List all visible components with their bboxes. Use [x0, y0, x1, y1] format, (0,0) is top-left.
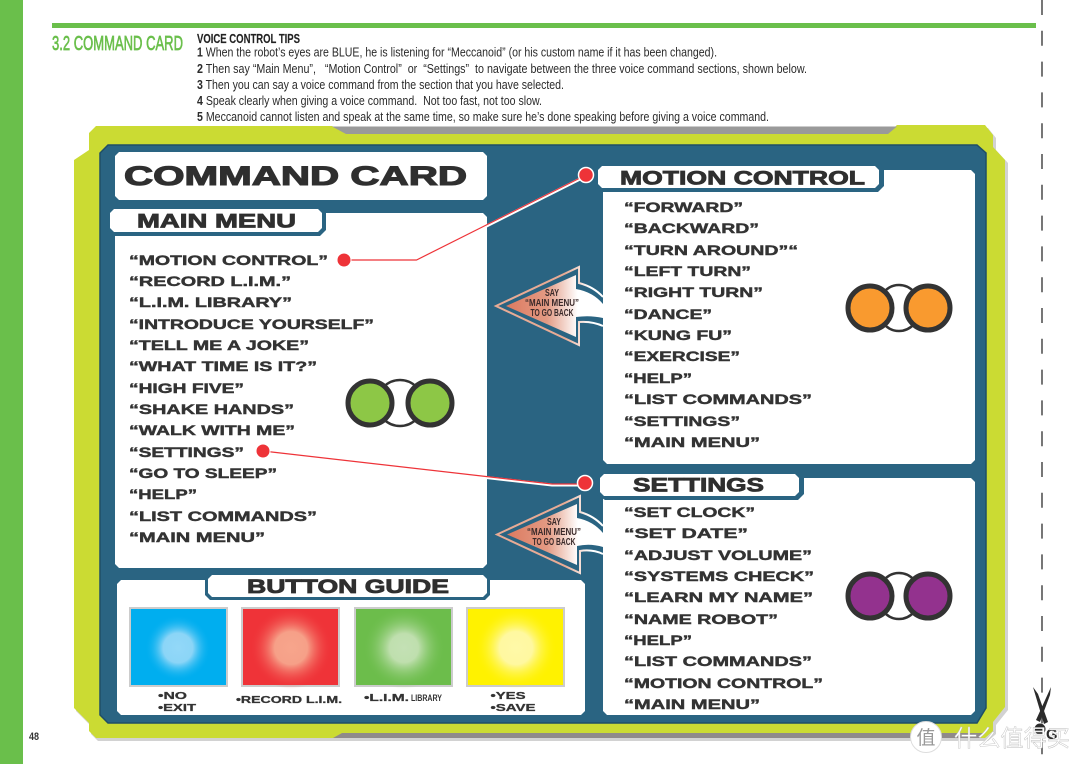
yellow button: •YES	[490, 690, 526, 702]
motion control commands: “MAIN MENU”	[624, 434, 760, 450]
tips heading: VOICE CONTROL TIPS	[197, 32, 300, 46]
arrow: say main menu, motion control: “MAIN MENU”	[525, 298, 579, 309]
settings commands: “SYSTEMS CHECK”	[624, 568, 814, 584]
voice control tips text block	[197, 32, 807, 124]
settings tab	[597, 471, 804, 500]
icon: scissors: G	[1046, 726, 1058, 743]
motion control tab	[595, 163, 884, 192]
watermark: 什么值得买	[954, 725, 1070, 751]
tip 2: 2 Then say “Main Menu”, “Motion Control” or “Settings” to navigate between the three voice command sections, shown below.	[197, 62, 807, 76]
main menu commands: “GO TO SLEEP”	[129, 465, 277, 481]
motion control commands: “LEFT TURN”	[624, 263, 751, 279]
arrow: say main menu, motion control	[496, 267, 603, 345]
settings commands: “MOTION CONTROL”	[624, 675, 823, 691]
yellow button: •SAVE	[490, 702, 536, 714]
motion control commands: “EXERCISE”	[624, 348, 740, 364]
top green rule	[52, 23, 1036, 28]
main menu commands: “RECORD L.I.M.”	[129, 273, 291, 289]
main menu commands: “WALK WITH ME”	[129, 422, 295, 438]
motion control commands: “FORWARD”	[624, 199, 743, 215]
main menu commands: “MAIN MENU”	[129, 529, 265, 545]
motion control commands: “LIST COMMANDS”	[624, 391, 812, 407]
settings commands: “SET DATE”	[624, 525, 748, 541]
motion control commands: “DANCE”	[624, 306, 712, 322]
main menu commands: “SHAKE HANDS”	[129, 401, 294, 417]
watermark	[910, 722, 1070, 752]
section heading: 3.2 COMMAND CARD	[52, 32, 183, 55]
icon: green robot eyes	[344, 376, 452, 430]
arrow: say main menu, motion control: TO GO BACK	[530, 308, 574, 319]
green button: •L.I.M.	[364, 692, 409, 704]
panel: main menu	[107, 207, 487, 568]
blue button: •NO	[158, 690, 187, 702]
panel: motion control	[595, 163, 975, 464]
motion control commands	[624, 199, 812, 450]
arrow: say main menu, settings	[497, 496, 603, 573]
arrow: say main menu, settings: SAY	[547, 517, 561, 528]
arrow: say main menu, motion control: SAY	[545, 288, 559, 299]
motion control commands: “KUNG FU”	[624, 327, 732, 343]
main menu commands: “TELL ME A JOKE”	[129, 337, 309, 353]
watermark: 值	[916, 727, 936, 749]
main title: COMMAND CARD	[124, 161, 467, 191]
left green page bar	[0, 0, 23, 764]
arrow: say main menu, settings: “MAIN MENU”	[527, 527, 581, 538]
red button: •RECORD L.I.M.	[236, 694, 342, 706]
main menu tab	[107, 207, 326, 236]
settings commands: “SET CLOCK”	[624, 504, 755, 520]
green button	[355, 607, 452, 704]
cut line	[1041, 0, 1043, 764]
main menu commands: “INTRODUCE YOURSELF”	[129, 316, 374, 332]
main menu commands: “HELP”	[129, 486, 197, 502]
motion control tab: MOTION CONTROL	[620, 168, 866, 190]
settings commands: “NAME ROBOT”	[624, 611, 778, 627]
tip 3: 3 Then you can say a voice command from the section that you have selected.	[197, 78, 564, 92]
main menu commands: “LIST COMMANDS”	[129, 508, 317, 524]
settings commands: “LEARN MY NAME”	[624, 589, 813, 605]
panel: button guide	[117, 574, 585, 715]
icon: orange robot eyes	[848, 285, 950, 331]
icon: purple robot eyes	[848, 573, 950, 619]
motion control commands: “BACKWARD”	[624, 220, 759, 236]
main menu commands: “MOTION CONTROL”	[129, 252, 328, 268]
settings commands: “LIST COMMANDS”	[624, 653, 812, 669]
main menu commands: “L.I.M. LIBRARY”	[129, 294, 292, 310]
icon: scissors	[1033, 687, 1058, 743]
blue button: •EXIT	[158, 702, 197, 714]
settings tab: SETTINGS	[633, 476, 764, 496]
main menu tab: MAIN MENU	[137, 212, 296, 232]
green button: LIBRARY	[411, 693, 442, 704]
tip 1: 1 When the robot’s eyes are BLUE, he is listening for “Meccanoid” (or his custom name if it has been changed).	[197, 46, 717, 60]
red button	[236, 607, 342, 706]
blue button	[130, 608, 227, 714]
page number: 48	[29, 731, 39, 743]
panel: settings	[597, 471, 975, 715]
button guide tab: BUTTON GUIDE	[247, 577, 449, 598]
yellow button	[467, 607, 564, 714]
settings commands: “HELP”	[624, 632, 692, 648]
main menu commands	[129, 252, 374, 545]
motion control commands: “SETTINGS”	[624, 413, 740, 429]
tip 5: 5 Meccanoid cannot listen and speak at the same time, so make sure he’s done speaking before giving a voice command.	[197, 110, 769, 124]
motion control commands: “RIGHT TURN”	[624, 284, 763, 300]
panel: title	[115, 152, 487, 200]
settings commands: “MAIN MENU”	[624, 696, 760, 712]
settings commands	[624, 504, 823, 712]
main menu commands: “WHAT TIME IS IT?”	[129, 358, 317, 374]
arrow: say main menu, settings: TO GO BACK	[532, 537, 576, 548]
connector: motion control	[337, 168, 594, 267]
main menu commands: “HIGH FIVE”	[129, 380, 244, 396]
tip 4: 4 Speak clearly when giving a voice command. Not too fast, not too slow.	[197, 94, 542, 108]
command card frame	[74, 125, 1008, 741]
connector: settings	[256, 444, 592, 490]
settings commands: “ADJUST VOLUME”	[624, 547, 812, 563]
motion control commands: “HELP”	[624, 370, 692, 386]
button guide tab	[205, 574, 490, 600]
main menu commands: “SETTINGS”	[129, 444, 244, 460]
motion control commands: “TURN AROUND”“	[624, 242, 798, 258]
